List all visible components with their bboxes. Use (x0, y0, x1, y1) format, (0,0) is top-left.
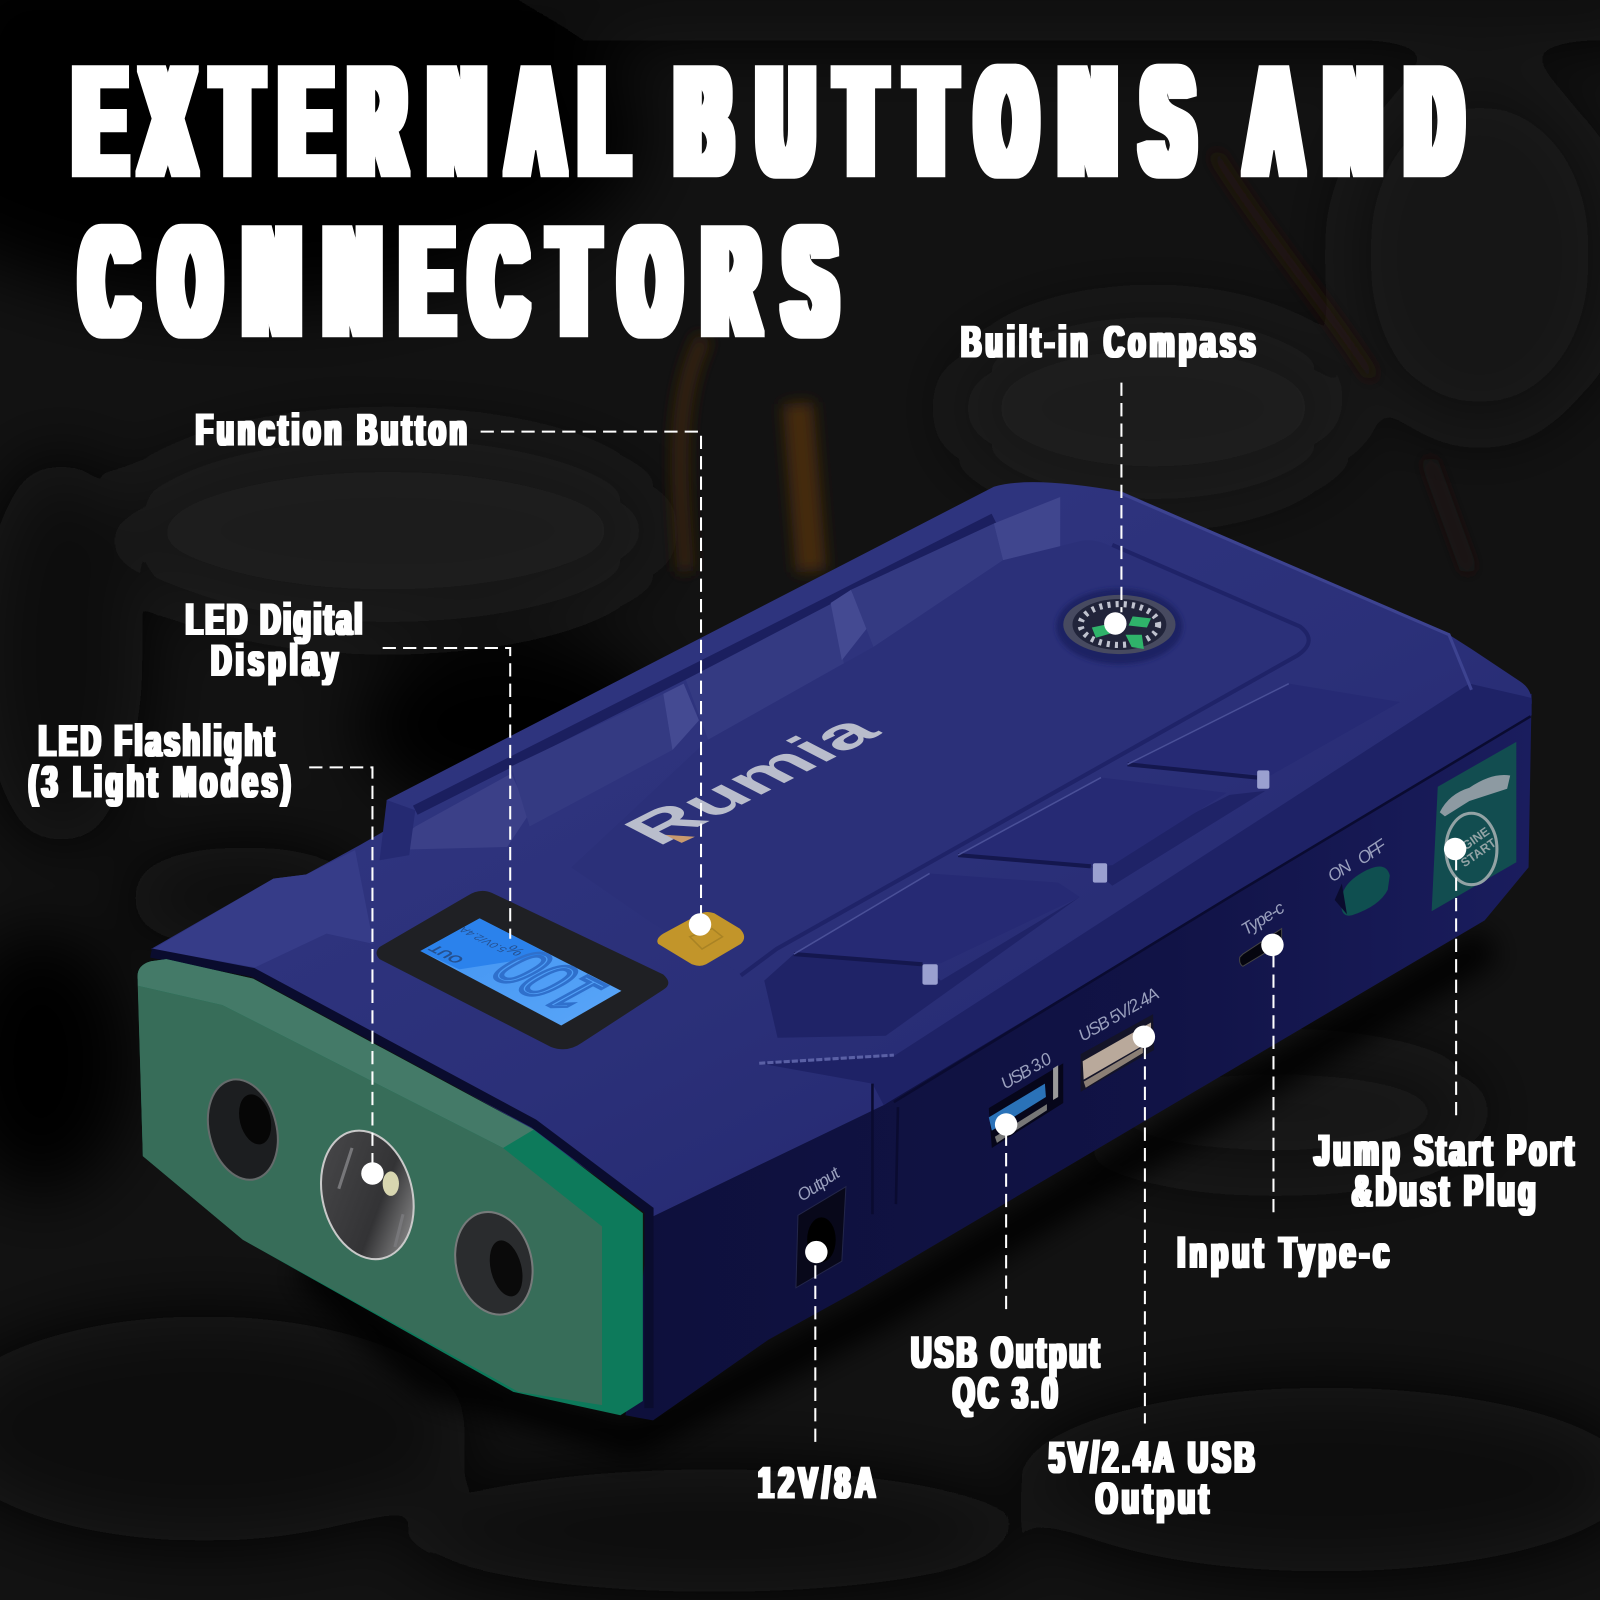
callout: jump start port: Jump Start Port (1314, 1124, 1574, 1175)
pad edge shading (794, 764, 1257, 964)
out tag: OUT (425, 942, 469, 965)
callout: built-in compass (961, 316, 1255, 635)
lid panel B (686, 603, 844, 740)
raised pad 2 upper facet (958, 778, 1227, 866)
callout: 5V/2.4A USB output: Output (1096, 1472, 1209, 1523)
lid stub B (831, 590, 868, 660)
callout: jump start port: &Dust Plug (1352, 1165, 1536, 1216)
callout: LED flashlight: (3 Light Modes) (29, 756, 290, 807)
brand name: Rumia (608, 706, 896, 853)
Type-c port (1237, 897, 1288, 966)
callout: 5V/2.4A USB output (1049, 1026, 1255, 1523)
built-in compass (1056, 589, 1183, 664)
title: EXTERNAL BUTTONS AND (76, 35, 1460, 208)
center flashlight lens (308, 1121, 427, 1269)
unit percent: % (501, 942, 530, 958)
lid flare (387, 773, 530, 850)
callout: input type-c: Input Type-c (1178, 1226, 1389, 1277)
lid panel C (851, 523, 1003, 647)
callout: USB output QC 3.0: QC 3.0 (953, 1367, 1057, 1418)
callout: USB output QC 3.0 (911, 1113, 1099, 1418)
raised pad 3 (1128, 684, 1400, 776)
plate rim (138, 959, 643, 1415)
front green lamp plate (138, 959, 643, 1415)
product: jump starter power bank (138, 482, 1532, 1420)
pad glints (922, 770, 1269, 985)
callout: LED digital display: LED Digital (186, 594, 362, 644)
reading digits: 100 (473, 940, 625, 1020)
jump start sticker (1432, 742, 1516, 911)
top edge groove (415, 518, 994, 810)
power switch (1324, 834, 1391, 916)
USB 3.0 label: USB 3.0 (997, 1048, 1055, 1093)
callout: 12V/8A output: 12V/8A (758, 1457, 875, 1508)
output port (793, 1162, 846, 1288)
device top surface (151, 482, 1532, 1216)
USB 3.0 port (989, 1048, 1063, 1148)
logo (608, 706, 896, 853)
corner notch highlight (759, 1055, 894, 1063)
pad edge highlights (794, 684, 1289, 954)
callout: built-in compass: Built-in Compass (961, 316, 1255, 367)
plate top shadow (151, 953, 649, 1408)
left lens (198, 1072, 288, 1187)
callout: LED digital display (186, 594, 510, 939)
callout: LED flashlight (29, 715, 384, 1185)
output label: Output (793, 1162, 844, 1205)
callout: 12V/8A output (758, 1241, 875, 1508)
USB 5V label: USB 5V/2.4A (1075, 983, 1162, 1045)
rim lower edge (872, 716, 1531, 1214)
LCD bezel (377, 891, 668, 1049)
right lens (445, 1204, 543, 1323)
compass plate groove (741, 545, 1309, 976)
logo orange accent (664, 835, 695, 843)
lid panel A (511, 694, 672, 827)
callout: jump start port (1314, 838, 1574, 1216)
callout: function button: Function Button (196, 404, 467, 455)
plate top band (138, 959, 534, 1148)
raised pad 2 lower facet (1091, 791, 1265, 886)
callout: LED digital display: Display (211, 635, 338, 685)
lit side rim (759, 684, 1532, 1105)
Type-c label: Type-c (1237, 897, 1288, 939)
lid stub A (663, 684, 699, 750)
plate face (138, 986, 602, 1405)
compass plate (571, 540, 1307, 973)
switch label: ON (1324, 855, 1356, 886)
power switch: OFF (1353, 834, 1391, 869)
title (76, 35, 1460, 368)
lid flare edge (380, 800, 415, 860)
right rim (1122, 494, 1471, 690)
callout: function button (196, 404, 711, 936)
left shoulder highlight (153, 850, 373, 967)
callout: 5V/2.4A USB output: 5V/2.4A USB (1049, 1432, 1255, 1482)
lid stub C (994, 497, 1060, 560)
raised pad 1 lower facet (764, 897, 1080, 1038)
LCD screen (420, 918, 625, 1026)
callout: USB output QC 3.0: USB Output (911, 1326, 1099, 1377)
voltage: 5.0V/2.4A (456, 925, 511, 953)
title: CONNECTORS (83, 195, 834, 368)
USB 5V port (1075, 983, 1162, 1092)
jump start text: START (1458, 835, 1499, 870)
callout: input type-c (1178, 934, 1389, 1277)
device side housing (626, 694, 1532, 1420)
callout: LED flashlight: LED Flashlight (39, 715, 274, 766)
function button (657, 912, 744, 966)
jump start text: ENGINE (1446, 824, 1492, 863)
raised pad 1 upper facet (794, 873, 1080, 963)
